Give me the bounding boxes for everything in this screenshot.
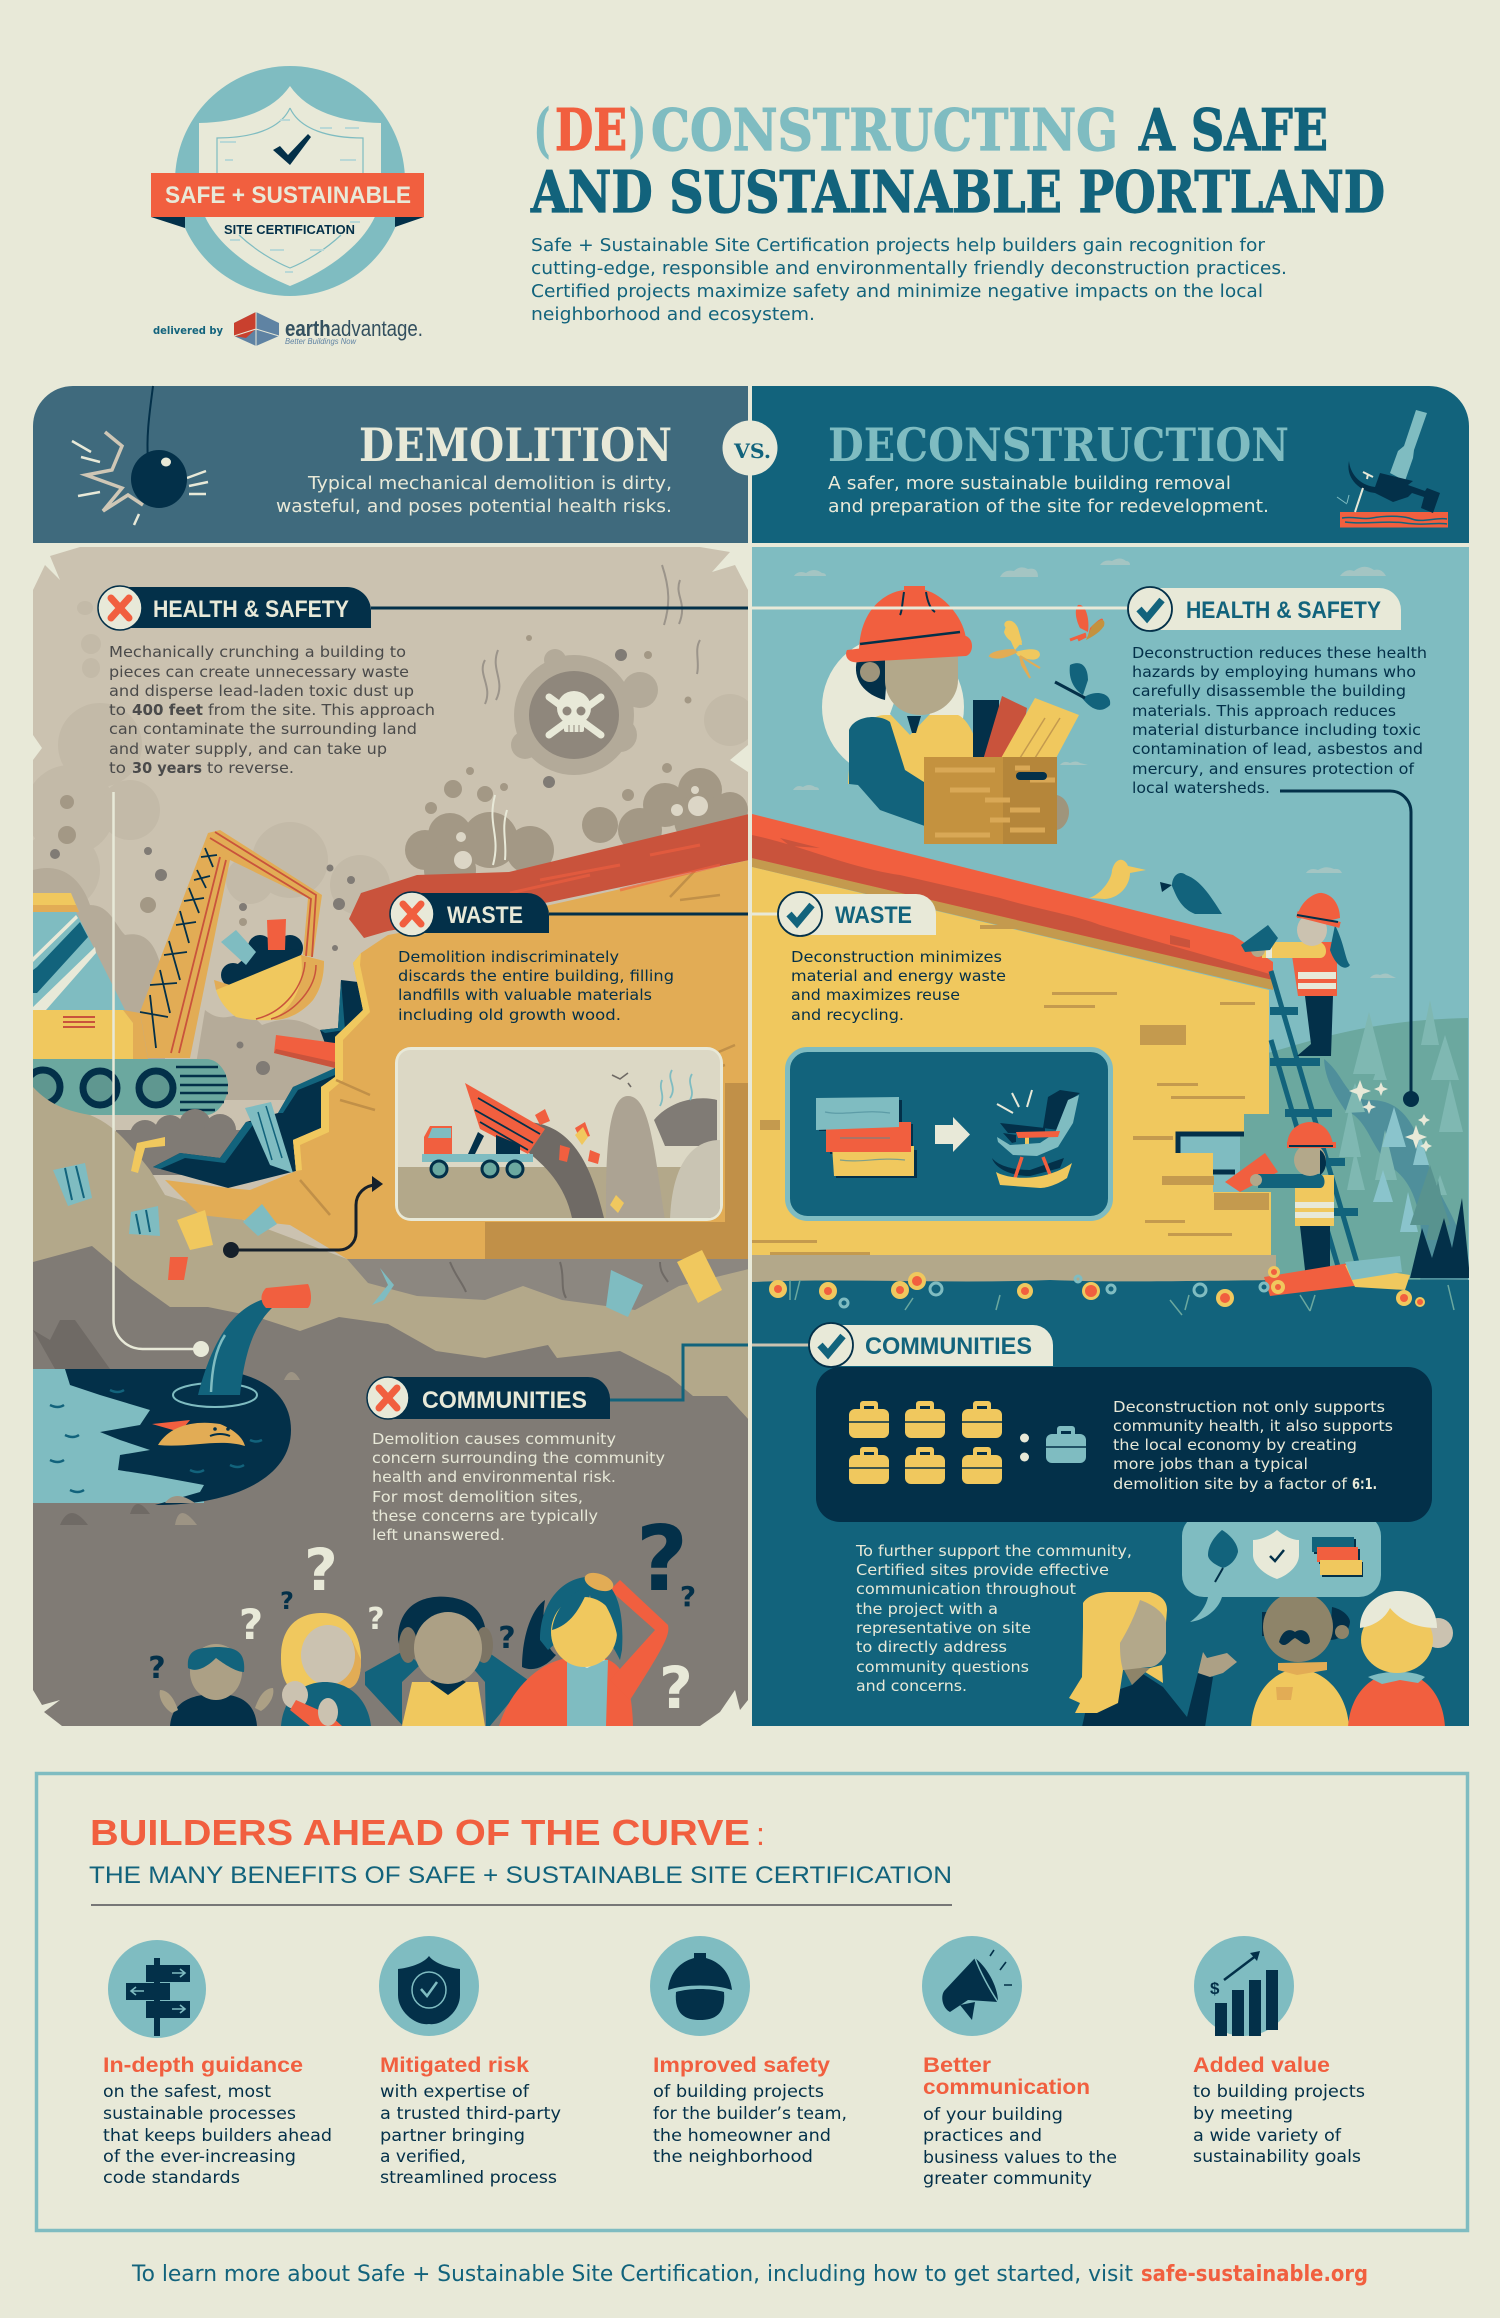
- text: demolition communities: left unanswered.: [372, 1526, 505, 1544]
- benefit: added value: [1193, 1936, 1365, 2166]
- title: (: [534, 97, 550, 164]
- intro text: neighborhood and ecosystem.: [531, 304, 815, 325]
- debris pieces: [53, 1137, 722, 1317]
- gray pavement: [347, 1259, 749, 1310]
- text: deconstruction health and safety: [1132, 644, 1427, 797]
- benefit: mitigated risk: streamlined process: [380, 2168, 557, 2187]
- title: [530, 97, 1385, 226]
- benefit: in-depth guidance: [103, 1940, 332, 2187]
- icon: rising chart: [1194, 1936, 1294, 2036]
- connector: health and safety to water: [114, 792, 200, 1349]
- sad fish: [152, 1420, 245, 1446]
- text: deconstruction communities: and concerns.: [856, 1677, 967, 1695]
- text: demolition waste: [398, 948, 674, 1024]
- connector: waste right: [752, 912, 785, 916]
- text: demolition health and safety: and water supply, and can take up: [109, 740, 387, 758]
- benefit: mitigated risk: a verified,: [380, 2147, 466, 2166]
- ladder: [1270, 971, 1365, 1290]
- text: deconstruction waste: material and energy waste: [791, 967, 1006, 985]
- benefit: in-depth guidance: code standards: [103, 2168, 240, 2187]
- text: deconstruction waste: and recycling.: [791, 1006, 904, 1024]
- benefit: improved safety: Improved safety: [653, 2054, 830, 2077]
- logo: delivered by earth advantage: earthadvantage.: [285, 316, 423, 341]
- benefit: added value: by meeting: [1193, 2104, 1293, 2123]
- text: deconstruction communities: [855, 1542, 1132, 1695]
- connector: communities: [610, 1345, 750, 1400]
- text: jobs: the local economy by creating: [1113, 1436, 1357, 1454]
- benefit: better communication: communication: [923, 2076, 1090, 2099]
- small rocks: [60, 1372, 300, 1525]
- panel divider with vs badge: [33, 386, 1469, 1726]
- text: demolition health and safety: can contaminate the surrounding land: [109, 720, 417, 738]
- benefit: in-depth guidance: on the safest, most: [103, 2082, 272, 2101]
- connector: health and safety: [371, 606, 750, 610]
- heading: builders ahead of the curve: BUILDERS AHEAD OF THE CURVE: [90, 1812, 750, 1853]
- text: demolition summary: wasteful, and poses potential health risks.: [276, 496, 672, 517]
- connector: waste arrow: [223, 1176, 383, 1258]
- panel: deconstruction header: [752, 386, 1469, 543]
- text: deconstruction health and safety: carefully disassemble the building: [1132, 682, 1406, 700]
- box of reclaimed materials: [924, 696, 1079, 844]
- excavator: [26, 830, 324, 1115]
- benefit: in-depth guidance: sustainable processes: [103, 2104, 296, 2123]
- text: deconstruction communities: representative on site: [856, 1619, 1031, 1637]
- text: demolition communities: Demolition causes community: [372, 1430, 616, 1448]
- badge: safe + sustainable site certification: SITE CERTIFICATION: [224, 222, 355, 237]
- text: jobs: 6:1.: [1352, 1475, 1377, 1493]
- intro text: cutting-edge, responsible and environmentally friendly deconstruction practices.: [531, 258, 1287, 279]
- benefit: added value: a wide variety of: [1193, 2126, 1342, 2145]
- text: jobs: community health, it also supports: [1113, 1417, 1393, 1435]
- connector: sparkling river link: [1280, 791, 1432, 1152]
- text: deconstruction summary: A safer, more sustainable building removal: [828, 473, 1231, 494]
- dust clouds: [33, 659, 382, 1100]
- text: demolition health and safety: to reverse.: [207, 759, 294, 777]
- text: deconstruction waste: Deconstruction minimizes: [791, 948, 1002, 966]
- text: demolition health and safety: pieces can create unnecessary waste: [109, 663, 409, 681]
- icon: rising chart: $: [1210, 1979, 1220, 1998]
- speech bubble: [1182, 1514, 1381, 1622]
- text: demolition waste: discards the entire building, filling: [398, 967, 674, 985]
- benefit: mitigated risk: Mitigated risk: [380, 2054, 529, 2077]
- title: A SAFE: [1138, 97, 1328, 164]
- hard hat: [846, 586, 972, 662]
- panel: demolition header: [33, 386, 748, 543]
- crack in building: [153, 980, 363, 1188]
- label: demolition communities: [367, 1377, 610, 1419]
- question marks: ?: [659, 1654, 693, 1722]
- dust cloud: roof: [405, 768, 748, 875]
- benefit: in-depth guidance: that keeps builders ahead: [103, 2126, 332, 2145]
- question marks: ?: [367, 1602, 385, 1637]
- tan ground: [33, 1087, 749, 1430]
- people: man covering ears: [365, 1597, 528, 1726]
- benefit: added value: sustainability goals: [1193, 2147, 1361, 2166]
- panel: demolition scene: [20, 547, 756, 1726]
- benefit: improved safety: [650, 1936, 847, 2166]
- house wall: [752, 867, 1271, 1255]
- intro text: Safe + Sustainable Site Certification projects help builders gain recognition for: [531, 235, 1266, 256]
- icon: hard hat: [650, 1936, 750, 2036]
- benefit: improved safety: for the builder’s team,: [653, 2104, 847, 2123]
- icon: pipe: [262, 1284, 311, 1308]
- label: demolition health and safety: [98, 586, 371, 630]
- blue plank: [245, 1102, 293, 1173]
- icon: hammer and plank: [1337, 410, 1448, 528]
- logo: delivered by earth advantage: Better Buildings Now: [285, 337, 357, 346]
- text: deconstruction summary: [828, 473, 1269, 517]
- question marks: ?: [239, 1600, 263, 1649]
- title: DE: [555, 97, 627, 164]
- benefit: better communication: practices and: [923, 2126, 1042, 2145]
- people: small child: [160, 1644, 273, 1726]
- icon: signpost: [108, 1940, 206, 2038]
- label: demolition waste: WASTE: [447, 902, 523, 929]
- connector: health and safety right: [752, 606, 1128, 610]
- red plank: [274, 1035, 335, 1068]
- icon: megaphone: [922, 1936, 1022, 2036]
- ground with flowers: [752, 1256, 1469, 1726]
- label: demolition waste: [390, 892, 549, 936]
- text: demolition health and safety: to: [109, 759, 126, 777]
- question marks: [150, 1523, 694, 1708]
- benefit: in-depth guidance: In-depth guidance: [103, 2054, 303, 2077]
- dust particles: [50, 635, 692, 1075]
- question marks: ?: [680, 1580, 696, 1613]
- text: demolition communities: these concerns are typically: [372, 1507, 598, 1525]
- footer call to action: To learn more about Safe + Sustainable Site Certification, including how to get started, visit: [131, 2262, 1133, 2287]
- worker on roof: [1241, 893, 1350, 1056]
- icon: material stack: [1312, 1537, 1363, 1577]
- text: deconstruction communities: to directly address: [856, 1638, 1007, 1656]
- text: deconstruction waste: and maximizes reuse: [791, 986, 960, 1004]
- people: man with mustache: [1251, 1592, 1350, 1727]
- label: deconstruction communities: COMMUNITIES: [865, 1333, 1032, 1360]
- footer call to action: safe-sustainable.org: [1141, 2262, 1368, 2287]
- icon: six briefcases: [849, 1401, 1002, 1484]
- benefit: added value: to building projects: [1193, 2082, 1365, 2101]
- benefit: better communication: [922, 1936, 1117, 2188]
- intro text: [531, 235, 1287, 325]
- benefit: better communication: business values to the: [923, 2148, 1117, 2167]
- text: demolition waste: Demolition indiscriminately: [398, 948, 619, 966]
- text: deconstruction summary: and preparation of the site for redevelopment.: [828, 496, 1269, 517]
- question marks: ?: [148, 1651, 166, 1686]
- text: demolition health and safety: 30 years: [132, 759, 202, 777]
- connector: waste: [549, 912, 750, 916]
- text: deconstruction health and safety: local watersheds.: [1132, 779, 1270, 797]
- subheading: benefits: THE MANY BENEFITS OF SAFE + SUSTAINABLE SITE CERTIFICATION: [89, 1862, 952, 1889]
- title: ): [629, 97, 646, 164]
- text: demolition communities: health and environmental risk.: [372, 1468, 616, 1486]
- text: jobs: more jobs than a typical: [1113, 1455, 1308, 1473]
- question marks: ?: [280, 1587, 294, 1615]
- ratio colon: [1020, 1434, 1029, 1462]
- hill and river: [1240, 1000, 1470, 1285]
- text: demolition summary: [276, 473, 672, 517]
- image panel: landfill truck: [395, 1047, 723, 1221]
- people: older woman: [1348, 1591, 1453, 1727]
- benefit: mitigated risk: partner bringing: [380, 2126, 525, 2145]
- benefit: improved safety: the neighborhood: [653, 2147, 813, 2166]
- foundation: [752, 1255, 1276, 1282]
- text: demolition summary: Typical mechanical demolition is dirty,: [307, 473, 672, 494]
- rubble cloud: [116, 1109, 246, 1175]
- benefit: mitigated risk: with expertise of: [380, 2082, 530, 2101]
- collapsed roof: [349, 814, 749, 938]
- icon: shield: [1253, 1530, 1299, 1579]
- text: deconstruction health and safety: hazards by employing humans who: [1132, 663, 1416, 681]
- text: demolition communities: concern surrounding the community: [372, 1449, 665, 1467]
- text: jobs: demolition site by a factor of: [1113, 1475, 1348, 1493]
- benefit: improved safety: the homeowner and: [653, 2126, 831, 2145]
- bucket with debris: [214, 919, 324, 1020]
- benefit: improved safety: of building projects: [653, 2082, 824, 2101]
- intro text: Certified projects maximize safety and minimize negative impacts on the local: [531, 281, 1263, 302]
- panel: benefits frame: [36, 1774, 1468, 2230]
- heading: deconstruction: DECONSTRUCTION: [828, 418, 1289, 472]
- text: deconstruction health and safety: material disturbance including toxic: [1132, 721, 1421, 739]
- icon: stacked planks: [816, 1097, 917, 1178]
- badge: safe + sustainable site certification: [151, 66, 424, 296]
- panel divider with vs badge: VS.: [733, 439, 771, 463]
- icon: one briefcase: [1046, 1426, 1086, 1463]
- people: woman scratching head: [499, 1569, 668, 1726]
- text: jobs: [1113, 1398, 1393, 1493]
- panel: deconstruction scene: [752, 547, 1470, 1727]
- benefit: mitigated risk: a trusted third-party: [380, 2104, 561, 2123]
- text: demolition health and safety: to: [109, 701, 126, 719]
- label: deconstruction waste: WASTE: [835, 902, 912, 929]
- text: deconstruction health and safety: Deconstruction reduces these health: [1132, 644, 1427, 662]
- text: demolition health and safety: and disperse lead-laden toxic dust up: [109, 682, 414, 700]
- benefit: better communication: of your building: [923, 2105, 1063, 2124]
- question marks: ?: [636, 1507, 688, 1612]
- clouds: [793, 558, 1396, 978]
- text: deconstruction health and safety: materials. This approach reduces: [1132, 702, 1396, 720]
- skull cloud: [483, 565, 700, 775]
- icon: leaf: [1208, 1530, 1238, 1582]
- text: demolition communities: For most demolition sites,: [372, 1488, 583, 1506]
- label: deconstruction communities: [809, 1323, 1053, 1367]
- text: demolition health and safety: Mechanically crunching a building to: [109, 643, 406, 661]
- text: demolition waste: including old growth wood.: [398, 1006, 621, 1024]
- people: blonde parent with baby: [281, 1613, 371, 1726]
- icon: rocking chair: [992, 1090, 1080, 1188]
- image panel: wood to rocking chair: [788, 1050, 1110, 1218]
- question marks: ?: [304, 1536, 338, 1604]
- icon: wrecking ball: [72, 386, 208, 525]
- worker on ladder: [1225, 1122, 1336, 1286]
- connector: communities right: [752, 1344, 812, 1346]
- butterflies: [990, 605, 1110, 710]
- people: speaker blonde: [1069, 1592, 1237, 1727]
- text: demolition health and safety: [109, 643, 435, 777]
- icon: shield: [379, 1936, 479, 2036]
- logo: delivered by earth advantage: [153, 312, 423, 346]
- text: demolition health and safety: 400 feet: [132, 701, 203, 719]
- panel: jobs ratio: [816, 1367, 1432, 1522]
- question marks: ?: [498, 1621, 516, 1656]
- benefit: better communication: Better: [923, 2054, 991, 2077]
- gray foreground: [33, 1246, 749, 1726]
- label: deconstruction waste: [778, 892, 936, 936]
- label: deconstruction health and safety: HEALTH & SAFETY: [1186, 597, 1381, 624]
- text: deconstruction communities: the project with a: [856, 1600, 998, 1618]
- wall cracks: [300, 860, 735, 1215]
- benefit: added value: Added value: [1193, 2054, 1330, 2077]
- big worker: [822, 586, 973, 826]
- text: deconstruction health and safety: contamination of lead, asbestos and: [1132, 740, 1423, 758]
- waterway with oil spill: [33, 1284, 311, 1505]
- text: deconstruction communities: To further support the community,: [855, 1542, 1132, 1560]
- title: CONSTRUCTING: [651, 97, 1118, 164]
- benefit: better communication: greater community: [923, 2169, 1092, 2188]
- text: deconstruction communities: Certified sites provide effective: [856, 1561, 1109, 1579]
- heading: builders ahead of the curve: :: [756, 1816, 765, 1852]
- corner bursts: [33, 547, 748, 1726]
- text: deconstruction communities: communication throughout: [856, 1580, 1076, 1598]
- badge: safe + sustainable site certification: SAFE + SUSTAINABLE: [165, 182, 411, 209]
- text: demolition health and safety: from the site. This approach: [208, 701, 435, 719]
- text: demolition communities: [372, 1430, 665, 1544]
- roof: [752, 814, 1273, 990]
- label: deconstruction health and safety: [1128, 587, 1401, 631]
- text: deconstruction waste: [791, 948, 1006, 1024]
- logo: delivered by earth advantage: delivered by: [153, 324, 223, 337]
- text: deconstruction communities: community questions: [856, 1658, 1029, 1676]
- benefit: in-depth guidance: of the ever-increasing: [103, 2147, 296, 2166]
- demolished wall: [165, 860, 749, 1259]
- label: demolition communities: COMMUNITIES: [422, 1387, 587, 1414]
- birds: [1089, 860, 1222, 914]
- text: demolition waste: landfills with valuable materials: [398, 986, 652, 1004]
- text: jobs: Deconstruction not only supports: [1113, 1398, 1385, 1416]
- text: deconstruction health and safety: mercury, and ensures protection of: [1132, 760, 1415, 778]
- benefit: mitigated risk: [379, 1936, 561, 2187]
- icon: arrow: [935, 1117, 970, 1152]
- heading: demolition: DEMOLITION: [359, 418, 672, 472]
- label: demolition health and safety: HEALTH & SAFETY: [153, 596, 349, 623]
